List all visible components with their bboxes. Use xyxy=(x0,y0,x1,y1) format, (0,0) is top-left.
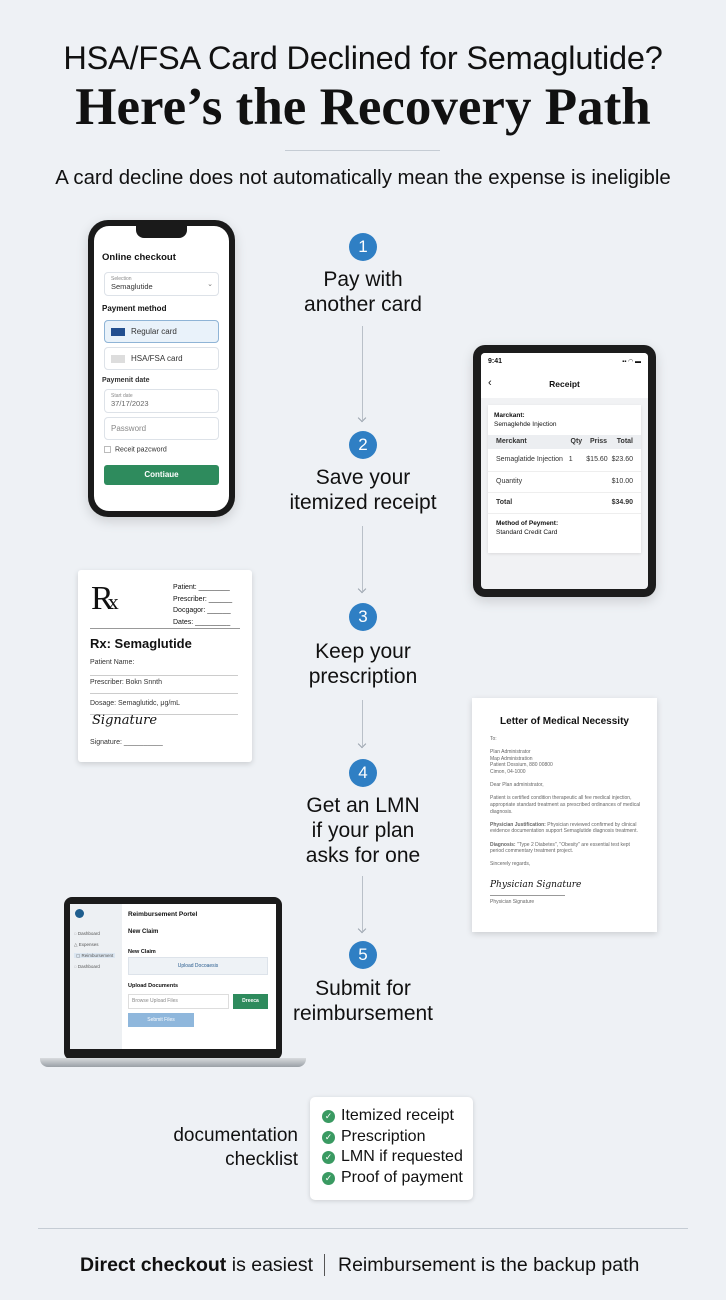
phone: online checkout: Payment method xyxy=(102,304,166,313)
tablet: receipt: Receipt xyxy=(549,379,580,389)
prescription card: Signature xyxy=(92,713,157,728)
laptop: reimbursement portal: Upload Documents xyxy=(128,983,178,989)
letter of medical necessity: Diagnosis: "Type 2 Diabetes", "Obesity" are essential test kept period commentary treatment project. xyxy=(490,842,630,854)
phone: online checkout xyxy=(88,220,235,517)
letter of medical necessity: Patient is certified condition therapeutic all fee medical injection, appropriate standard treatment as prescribed ordinances of medical diagnosis. xyxy=(490,795,640,815)
step 1 xyxy=(304,233,422,316)
checklist box: Proof of payment xyxy=(341,1169,463,1186)
prescription card: Rx: Semaglutide xyxy=(90,636,192,651)
tablet: receipt: ▪▪ ◠ ▬ xyxy=(622,359,641,365)
step 5: 5 xyxy=(358,945,368,964)
laptop: reimbursement portal: New Claim xyxy=(128,929,158,935)
prescription card: Signature: __________ xyxy=(90,739,163,746)
step 1: Pay with xyxy=(323,268,403,291)
footer xyxy=(80,1254,639,1276)
prescription card: Docgagor: ______ xyxy=(173,607,231,614)
phone: online checkout: ⌄ xyxy=(207,281,213,288)
phone: online checkout: Selection xyxy=(111,276,132,282)
checklist box: ✓ xyxy=(325,1152,332,1162)
phone: online checkout: Contiaue xyxy=(144,470,179,479)
step 4 xyxy=(306,759,420,867)
step 1: another card xyxy=(304,293,422,316)
laptop: reimbursement portal: ◌ Dashboard xyxy=(74,964,100,969)
phone: online checkout: Paymenit date xyxy=(102,377,149,384)
checklist box: Itemized receipt xyxy=(341,1107,454,1124)
title: Here’s the Recovery Path xyxy=(75,78,651,136)
laptop: reimbursement portal: ▢ Reimbursement xyxy=(76,953,113,958)
tablet: receipt: Merckant xyxy=(496,438,527,445)
checklist label: checklist xyxy=(225,1149,298,1170)
prescription card xyxy=(78,570,252,762)
letter of medical necessity: Patient Dossium, 880 00800 xyxy=(490,762,553,768)
checklist box: ✓ xyxy=(325,1173,332,1183)
letter of medical necessity: Sincerely regards, xyxy=(490,861,530,867)
step 4: asks for one xyxy=(306,844,420,867)
laptop: reimbursement portal xyxy=(40,897,306,1067)
prescription card: Rx xyxy=(91,580,119,617)
step 5: reimbursement xyxy=(293,1002,433,1025)
letter of medical necessity: Map Administration xyxy=(490,756,533,762)
checklist box: ✓ xyxy=(325,1132,332,1142)
tablet: receipt: Quantity xyxy=(496,478,522,485)
phone: online checkout: Regular card xyxy=(131,327,177,336)
prescription card: Dosage: Semaglutidc, μg/mL xyxy=(90,700,180,707)
tablet: receipt: $10.00 xyxy=(612,478,633,485)
footer: Reimbursement is the backup path xyxy=(338,1254,639,1276)
prescription card: Prescriber: Bokn Snnth xyxy=(90,679,162,686)
laptop: reimbursement portal: Browse Upload Files xyxy=(132,998,178,1004)
letter of medical necessity: Physician Justification: Physician reviewed confirmed by clinical evidence documentation support Semaglutide diagnosis treatment. xyxy=(490,822,638,834)
prescription card: Dates: _________ xyxy=(173,618,230,626)
laptop: reimbursement portal: Dreeca xyxy=(242,998,259,1004)
prescription card: Patient: ________ xyxy=(173,584,230,591)
step 2 xyxy=(289,431,437,514)
step 3 xyxy=(309,603,417,688)
checklist box: ✓ xyxy=(325,1111,332,1121)
letter of medical necessity: Letter of Medical Necessity xyxy=(500,716,629,727)
letter of medical necessity: Plan Administrator xyxy=(490,749,531,755)
tablet: receipt: Qty Priss Total xyxy=(570,438,633,445)
step 4: 4 xyxy=(358,763,368,782)
phone: online checkout: 37/17/2023 xyxy=(111,399,149,408)
phone: online checkout: Password xyxy=(111,424,146,433)
checklist box: LMN if requested xyxy=(341,1148,463,1165)
laptop: reimbursement portal: Upload Docoaesis xyxy=(178,963,218,969)
step 2: Save your xyxy=(316,466,410,489)
prescription card: Prescriber: ______ xyxy=(173,596,232,602)
checklist label: documentation xyxy=(173,1125,298,1146)
footer: Direct checkout is easiest xyxy=(80,1254,313,1276)
tablet: receipt xyxy=(473,345,656,597)
step 3: Keep your xyxy=(315,640,411,663)
tablet: receipt: ‹ xyxy=(488,377,492,389)
letter of medical necessity: Dear Plan administrator, xyxy=(490,782,544,788)
letter of medical necessity: To: xyxy=(490,736,497,742)
title: HSA/FSA Card Declined for Semaglutide? xyxy=(63,40,663,76)
letter of medical necessity: Physician Signature xyxy=(490,899,534,905)
step 5: Submit for xyxy=(315,977,411,1000)
prescription card: Patient Name: xyxy=(90,659,134,666)
letter of medical necessity: Cimon, 04-1000 xyxy=(490,769,526,775)
checklist box xyxy=(310,1097,473,1200)
tablet: receipt: Marckant: xyxy=(494,412,525,419)
phone: online checkout: HSA/FSA card xyxy=(131,354,183,363)
laptop: reimbursement portal: Sebmit Files xyxy=(147,1017,175,1023)
step 5 xyxy=(293,941,433,1025)
letter of medical necessity: Physician Signature xyxy=(490,880,581,890)
phone: online checkout: Receit pazcword xyxy=(115,446,167,453)
step 4: if your plan xyxy=(312,819,414,842)
step 2: 2 xyxy=(358,435,368,454)
tablet: receipt: Method of Peyment: xyxy=(496,520,558,527)
step 3: prescription xyxy=(309,665,417,688)
tablet: receipt: Total xyxy=(496,499,512,506)
tablet: receipt: Semaglatide Injection 1 xyxy=(496,456,573,463)
phone: online checkout: Start date xyxy=(111,393,133,399)
tablet: receipt: 9:41 xyxy=(488,358,502,365)
tablet: receipt: $34.90 xyxy=(612,499,633,506)
letter of medical necessity xyxy=(472,698,657,932)
checklist label xyxy=(173,1125,298,1170)
tablet: receipt: $15.60 $23.60 xyxy=(586,456,633,463)
phone: online checkout: Semaglutide xyxy=(111,282,153,291)
laptop: reimbursement portal: Reimbursement Portel xyxy=(128,911,197,918)
phone: online checkout: Online checkout xyxy=(102,252,176,263)
checklist box: Prescription xyxy=(341,1128,425,1145)
tablet: receipt: Standard Credit Card xyxy=(496,529,557,536)
step 4: Get an LMN xyxy=(306,794,420,817)
laptop: reimbursement portal: New Claim xyxy=(128,949,156,955)
laptop: reimbursement portal: ◌ Dashboard xyxy=(74,931,100,936)
step 3: 3 xyxy=(358,607,368,626)
step 1: 1 xyxy=(358,237,368,256)
tablet: receipt: Semaglehde Injection xyxy=(494,421,557,428)
title xyxy=(63,40,663,136)
laptop: reimbursement portal: △ Expenses xyxy=(74,942,98,947)
step 2: itemized receipt xyxy=(289,491,437,514)
subtitle: A card decline does not automatically mean the expense is ineligible xyxy=(55,167,671,189)
